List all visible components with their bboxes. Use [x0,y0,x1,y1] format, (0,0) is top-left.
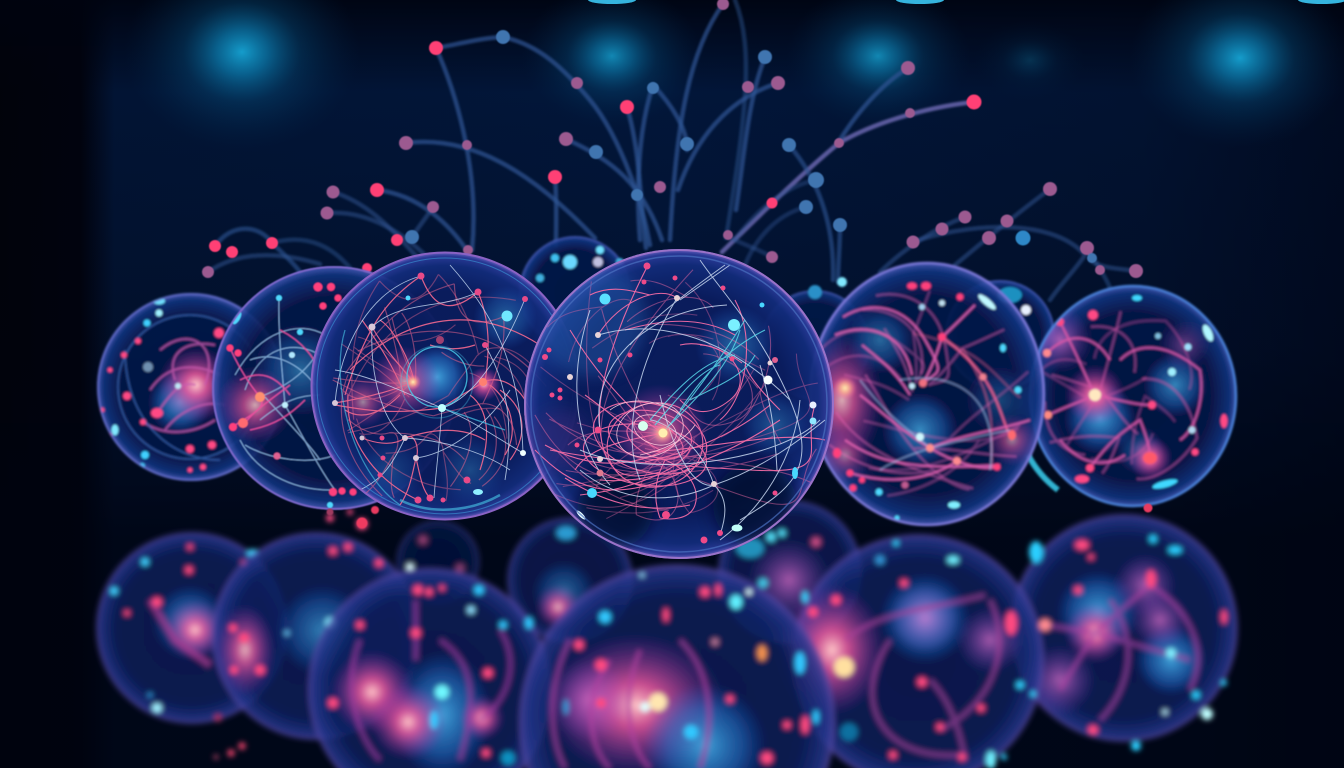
reflection: sphere 4 [519,564,835,768]
back spheres [519,236,1055,400]
reflection: sphere 3 [308,568,552,768]
floor reflection of the spheres [96,500,1238,768]
reflection: back sphere centre-left [507,517,633,643]
sphere 5 [802,262,1056,526]
sphere 3 [310,252,556,520]
reflection: sphere 2 [212,509,420,760]
reflection: sphere 6 [1010,514,1238,751]
sphere 6 (far right) [1013,281,1237,514]
reflection: sphere 5 [778,534,1044,768]
dots under the spheres [326,504,1152,528]
reflection: back sphere centre-right [718,500,862,644]
sphere 1 (far left) [97,293,285,481]
filaments rising above the spheres [208,0,1136,300]
ceiling lamps [124,0,1344,152]
reflection: sphere 1 [96,532,288,724]
filament end nodes [202,0,1143,278]
sphere 4 (centre, largest) [524,249,834,559]
sphere 2 [212,265,416,511]
reflection: far back sphere [396,520,480,604]
